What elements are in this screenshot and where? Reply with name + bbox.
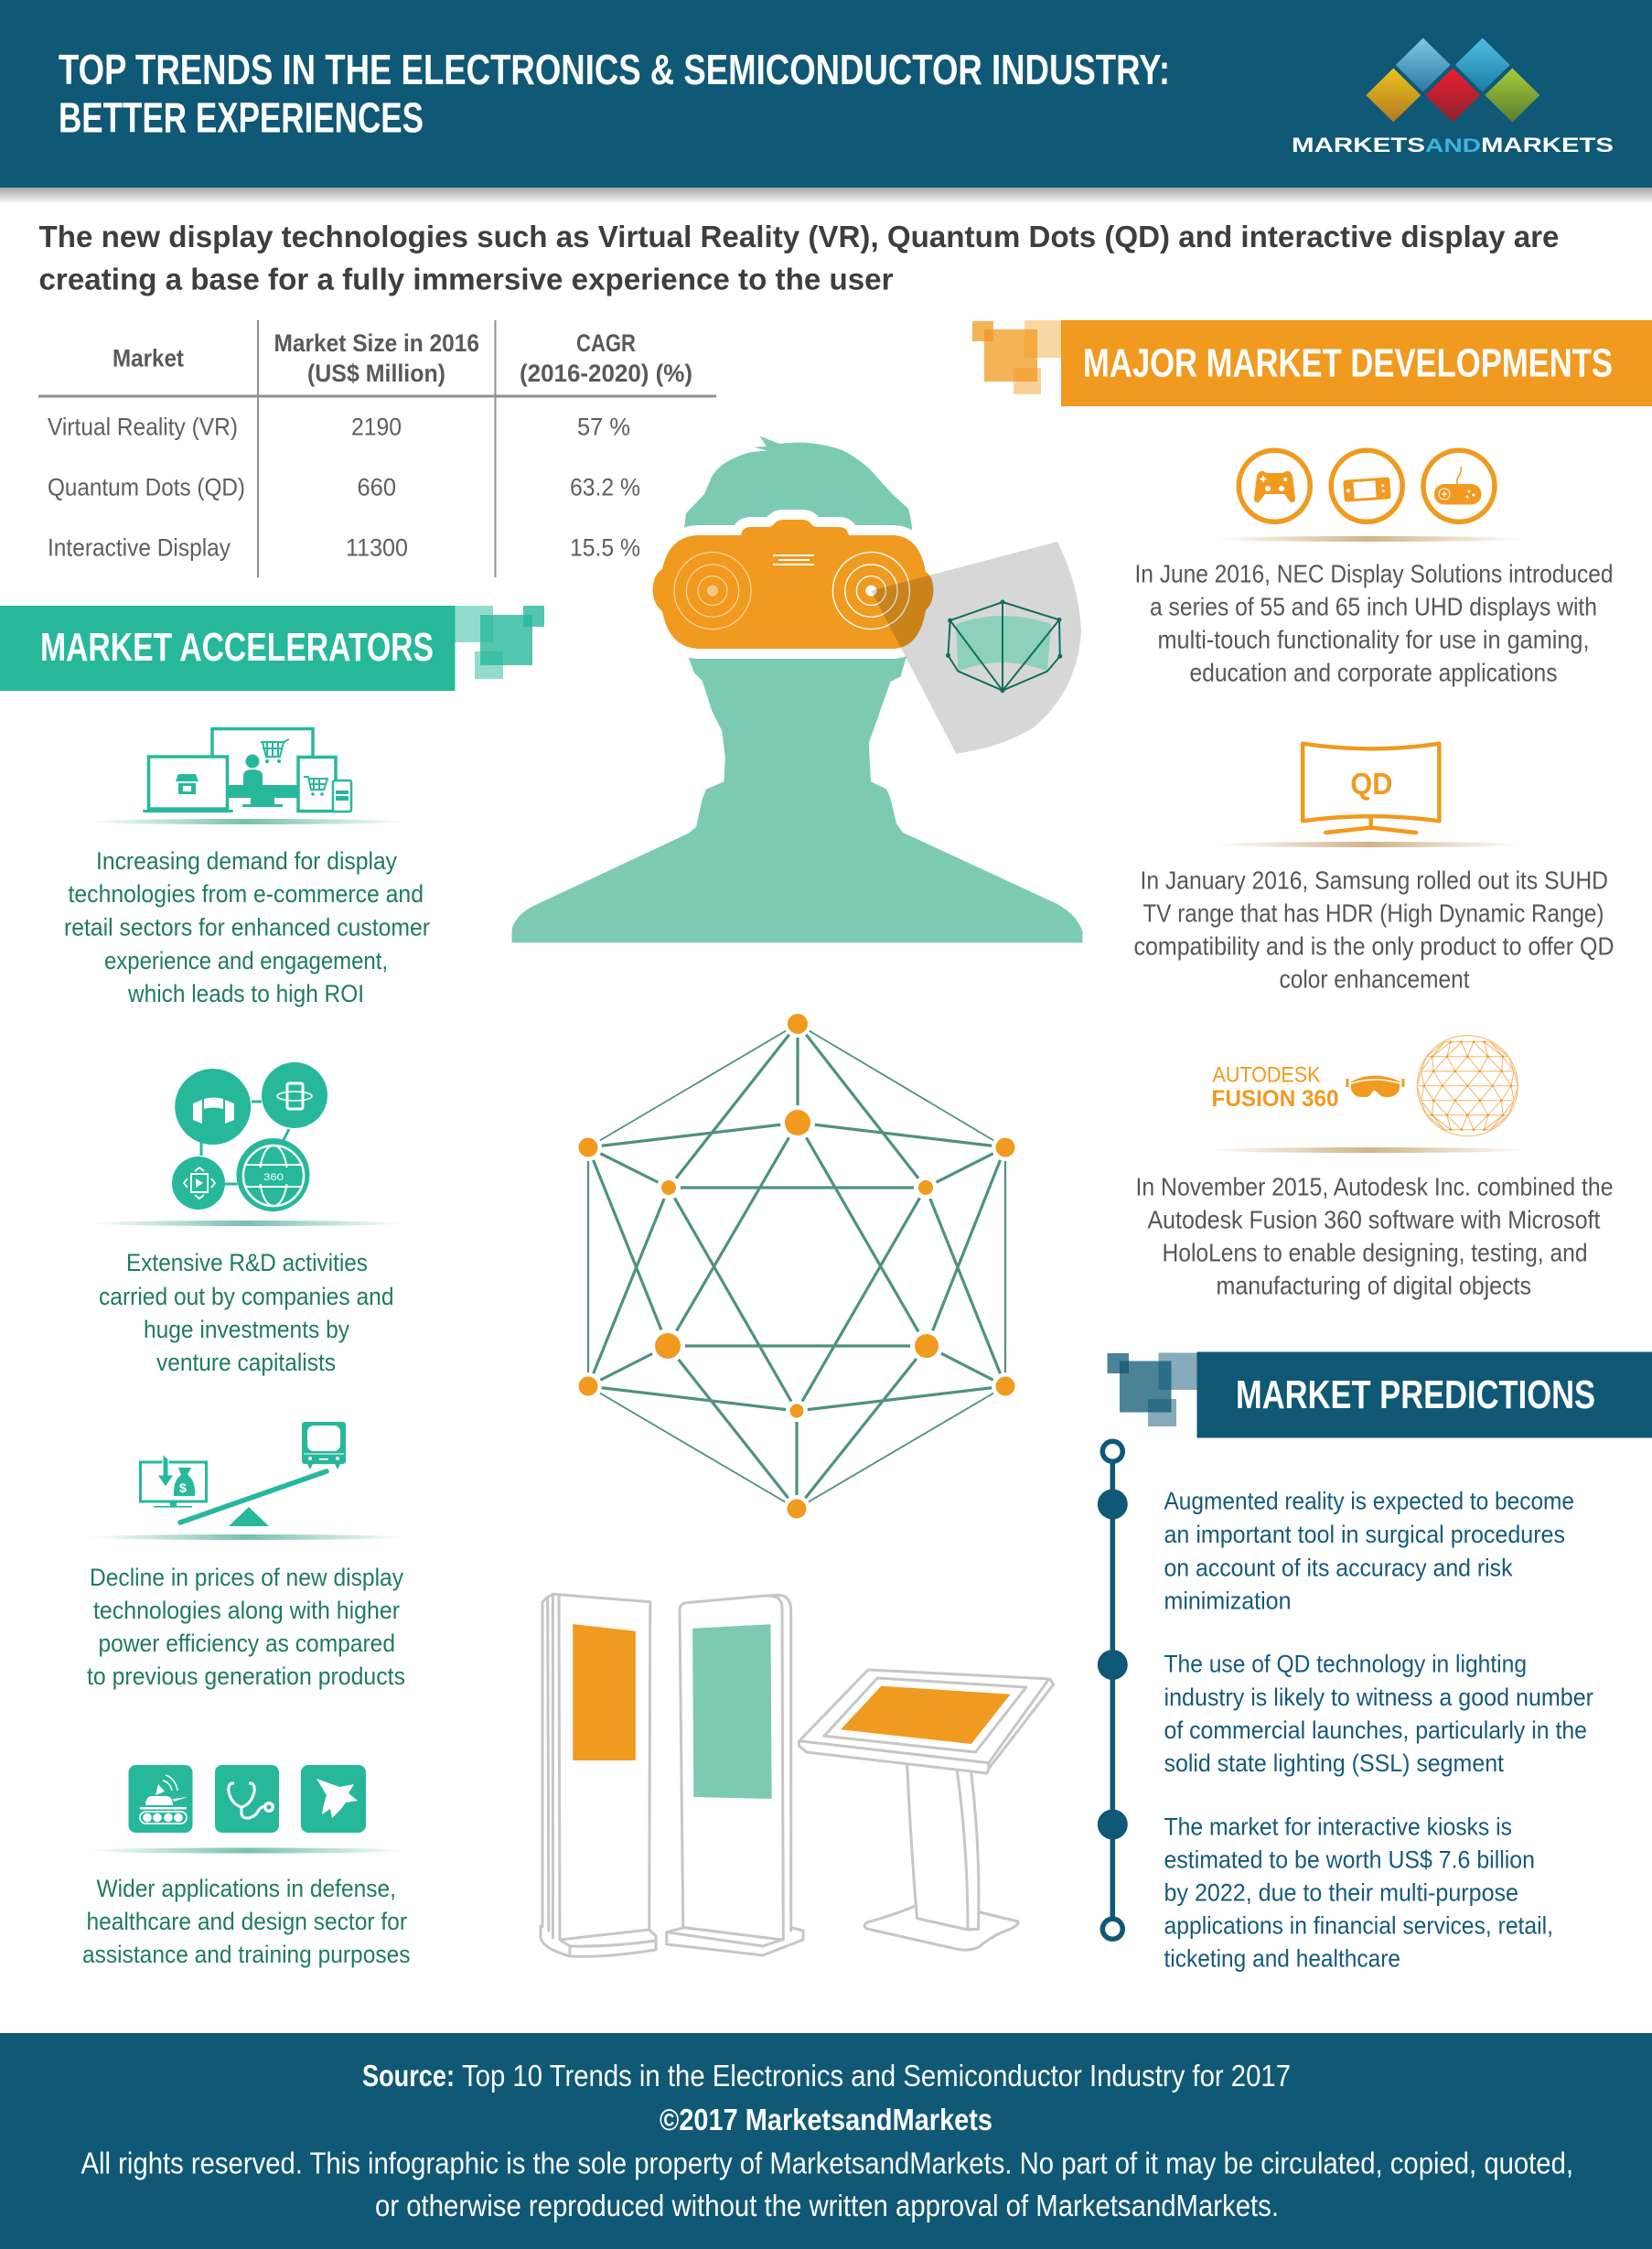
panel: accelerator 3 price decline <box>87 1422 407 1690</box>
text: NEC displays: a series of 55 and 65 inch UHD displays with <box>1150 593 1597 620</box>
table rows: 2190 <box>351 414 402 441</box>
table rows: 63.2 % <box>570 474 640 501</box>
text: R&D activities: venture capitalists <box>156 1349 336 1376</box>
intro heading: The new display technologies such as Virtual Reality (VR), Quantum Dots (QD) and interactive display are <box>38 220 1560 253</box>
illustration: person wearing VR headset <box>512 436 1083 942</box>
text: wider applications: assistance and training purposes <box>82 1941 410 1968</box>
icon: curved QD TV: QD <box>1350 767 1392 801</box>
text: demand for displays <box>64 847 430 1007</box>
copyright: ©2017 MarketsandMarkets <box>660 2103 992 2136</box>
heading: major market developments <box>972 320 1652 406</box>
intro heading: creating a base for a fully immersive experience to the user <box>38 262 894 296</box>
panel: accelerator 2 R&D <box>90 1062 404 1376</box>
text: R&D activities: carried out by companies and <box>99 1283 393 1310</box>
heading: market accelerators <box>0 606 544 691</box>
text: price decline: power efficiency as compared <box>99 1630 395 1657</box>
text: prediction augmented reality: on account of its accuracy and risk <box>1164 1554 1513 1581</box>
text: NEC displays: multi-touch functionality for use in gaming, <box>1158 626 1590 653</box>
panel: accelerator 1 e-commerce <box>64 728 430 1007</box>
text: Samsung SUHD <box>1134 866 1614 994</box>
text: price decline <box>87 1564 405 1690</box>
icon: handheld console <box>1331 450 1402 522</box>
table rows: 57 % <box>577 414 630 441</box>
market size table <box>38 320 716 577</box>
text: demand for displays: technologies from e-commerce and <box>68 880 424 908</box>
table header: (2016-2020) (%) <box>520 360 692 387</box>
heading: market accelerators: MARKET ACCELERATORS <box>40 625 434 670</box>
text: wider applications: healthcare and design sector for <box>86 1908 407 1935</box>
title: TOP TRENDS IN THE ELECTRONICS & SEMICONDUCTOR INDUSTRY: <box>59 46 1170 93</box>
text: prediction interactive kiosks <box>1164 1813 1553 1973</box>
text: prediction interactive kiosks: ticketing and healthcare <box>1164 1945 1400 1973</box>
table rows: 15.5 % <box>570 534 640 562</box>
icon: curved QD TV <box>1303 744 1439 833</box>
text: wider applications: Wider applications in defense, <box>97 1875 396 1902</box>
logo: MarketsandMarkets: MARKETS <box>1481 134 1614 156</box>
text: prediction QD lighting: The use of QD technology in lighting <box>1164 1651 1527 1678</box>
table rows: 660 <box>357 474 396 501</box>
text: demand for displays: experience and engagement, <box>104 947 388 974</box>
title <box>59 46 1170 141</box>
logo: MarketsandMarkets <box>1292 38 1614 156</box>
icon: gamepad <box>1239 450 1310 522</box>
text: prediction QD lighting <box>1164 1651 1593 1777</box>
kiosk 1 <box>541 1594 656 1956</box>
projection cone with wireframe <box>871 542 1081 754</box>
icon: retro controller <box>1423 450 1495 522</box>
headset <box>653 520 933 649</box>
text: wider applications <box>82 1875 410 1968</box>
table header: Market Size in 2016 <box>274 329 479 357</box>
source line: Source: <box>362 2059 455 2093</box>
icon: seesaw with TV and price monitor: $ <box>179 1480 187 1495</box>
table rows: Virtual Reality (VR) <box>48 414 238 441</box>
text: price decline: to previous generation products <box>87 1663 405 1690</box>
text: Autodesk HoloLens: HoloLens to enable designing, testing, and <box>1162 1239 1588 1266</box>
header banner <box>0 0 1652 204</box>
panel: development Samsung <box>1134 744 1614 994</box>
text: R&D activities <box>99 1249 393 1376</box>
hair <box>683 436 913 534</box>
text: demand for displays: retail sectors for enhanced customer <box>64 913 430 941</box>
table rows: 11300 <box>346 534 408 562</box>
text: price decline: Decline in prices of new display <box>90 1564 403 1591</box>
text: Autodesk HoloLens <box>1136 1173 1614 1299</box>
kiosk 3 <box>799 1670 1054 1950</box>
title: BETTER EXPERIENCES <box>59 93 424 141</box>
text: prediction interactive kiosks: The market for interactive kiosks is <box>1164 1813 1512 1841</box>
icon: devices and shopping <box>143 728 351 812</box>
table header: Market <box>113 344 184 371</box>
illustration: interactive kiosks <box>541 1594 1054 1956</box>
rights notice <box>80 2147 1573 2222</box>
text: prediction QD lighting: solid state lighting (SSL) segment <box>1164 1749 1504 1777</box>
icon: design aircraft <box>301 1765 366 1833</box>
logo: MarketsandMarkets: MARKETS <box>1292 134 1425 156</box>
rights notice: or otherwise reproduced without the written approval of MarketsandMarkets. <box>375 2189 1279 2222</box>
table header <box>113 329 692 387</box>
text: prediction interactive kiosks: applications in financial services, retail, <box>1164 1912 1553 1940</box>
text: prediction augmented reality: an important tool in surgical procedures <box>1164 1521 1565 1548</box>
footer <box>0 2033 1652 2249</box>
intro heading <box>38 220 1560 296</box>
icon: seesaw with TV and price monitor <box>141 1422 346 1526</box>
panel: development Autodesk <box>1136 1036 1614 1299</box>
text: demand for displays: which leads to high ROI <box>127 980 364 1007</box>
text: prediction augmented reality <box>1164 1488 1574 1614</box>
text: prediction augmented reality: minimization <box>1164 1587 1292 1614</box>
table rows <box>48 414 640 562</box>
logo: MarketsandMarkets: AND <box>1425 135 1481 156</box>
text: prediction QD lighting: of commercial launches, particularly in the <box>1164 1716 1587 1744</box>
panel: development NEC <box>1134 450 1614 686</box>
text: price decline: technologies along with higher <box>93 1597 400 1624</box>
icon: Autodesk Fusion 360 logo with HoloLens and sphere <box>1211 1036 1518 1136</box>
icon: Autodesk Fusion 360 logo with HoloLens and sphere: FUSION 360 <box>1211 1086 1339 1112</box>
text: Samsung SUHD: color enhancement <box>1279 964 1470 994</box>
icon: Autodesk Fusion 360 logo with HoloLens and sphere: AUTODESK <box>1213 1063 1321 1087</box>
text: prediction interactive kiosks: estimated to be worth US$ 7.6 billion <box>1164 1846 1535 1874</box>
timeline <box>1098 1441 1128 1939</box>
table header: (US$ Million) <box>307 360 445 387</box>
source line: Top 10 Trends in the Electronics and Semiconductor Industry for 2017 <box>462 2059 1291 2093</box>
table rows: Quantum Dots (QD) <box>48 474 245 501</box>
text: Autodesk HoloLens: manufacturing of digital objects <box>1217 1272 1531 1299</box>
text: NEC displays <box>1134 560 1614 686</box>
text: NEC displays: education and corporate applications <box>1189 659 1557 686</box>
text: prediction augmented reality: Augmented reality is expected to become <box>1164 1488 1574 1515</box>
icon: healthcare stethoscope <box>215 1765 279 1833</box>
table rows: Interactive Display <box>48 534 231 562</box>
text: R&D activities: Extensive R&D activities <box>126 1249 368 1276</box>
text: Autodesk HoloLens: Autodesk Fusion 360 software with Microsoft <box>1147 1206 1601 1233</box>
kiosk 2 <box>667 1595 803 1955</box>
text: prediction QD lighting: industry is likely to witness a good number <box>1164 1684 1593 1711</box>
text: R&D activities: huge investments by <box>144 1316 349 1343</box>
heading: market predictions <box>1107 1352 1652 1438</box>
icon: connected technology circles: 360 <box>263 1172 284 1183</box>
table header: CAGR <box>576 329 636 357</box>
text: demand for displays: Increasing demand for display <box>96 847 397 875</box>
icon: defense tank <box>128 1765 192 1833</box>
text: prediction interactive kiosks: by 2022, due to their multi-purpose <box>1164 1879 1518 1907</box>
body silhouette <box>512 656 1083 942</box>
illustration: quantum dot network <box>574 1010 1019 1523</box>
panel: accelerator 4 applications <box>82 1765 410 1968</box>
icon: connected technology circles <box>172 1062 327 1211</box>
